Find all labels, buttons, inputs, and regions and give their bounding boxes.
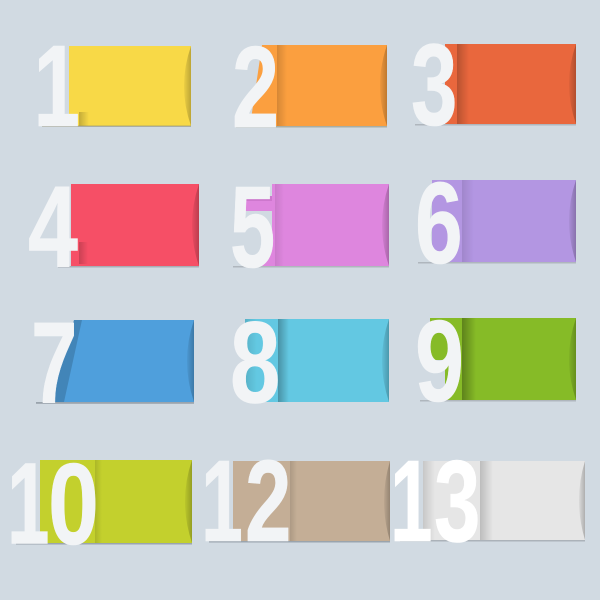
number 12 — [201, 435, 291, 566]
panel 6 — [415, 158, 576, 288]
number 3: 3 — [411, 21, 457, 150]
panel 13 — [390, 436, 585, 566]
panel 3 — [411, 21, 576, 150]
panel 7 — [31, 300, 194, 428]
panel 5 — [230, 163, 389, 292]
number 4: 4 — [28, 162, 78, 292]
number 10: 0 — [48, 440, 99, 570]
number 6: 6 — [415, 158, 463, 288]
number 10 — [7, 438, 99, 570]
number 1: 1 — [34, 23, 80, 151]
number 12: 2 — [245, 438, 291, 566]
number 2: 2 — [232, 22, 279, 152]
number 13: 1 — [390, 436, 433, 566]
panel 9 — [415, 296, 576, 426]
number 13 — [390, 436, 480, 566]
number 12: 1 — [201, 435, 243, 566]
number 9: 9 — [415, 296, 464, 426]
panel 1 — [34, 23, 191, 151]
number 8: 8 — [230, 299, 280, 428]
number 10: 1 — [7, 438, 50, 568]
panel 8 — [230, 299, 389, 428]
number 5: 5 — [230, 163, 275, 292]
panel 12 — [201, 435, 390, 566]
number 13: 3 — [434, 438, 480, 566]
number 7: 7 — [31, 300, 77, 428]
panel 4 — [28, 162, 199, 292]
panel 10 — [7, 438, 192, 570]
panel 2 — [232, 22, 387, 152]
